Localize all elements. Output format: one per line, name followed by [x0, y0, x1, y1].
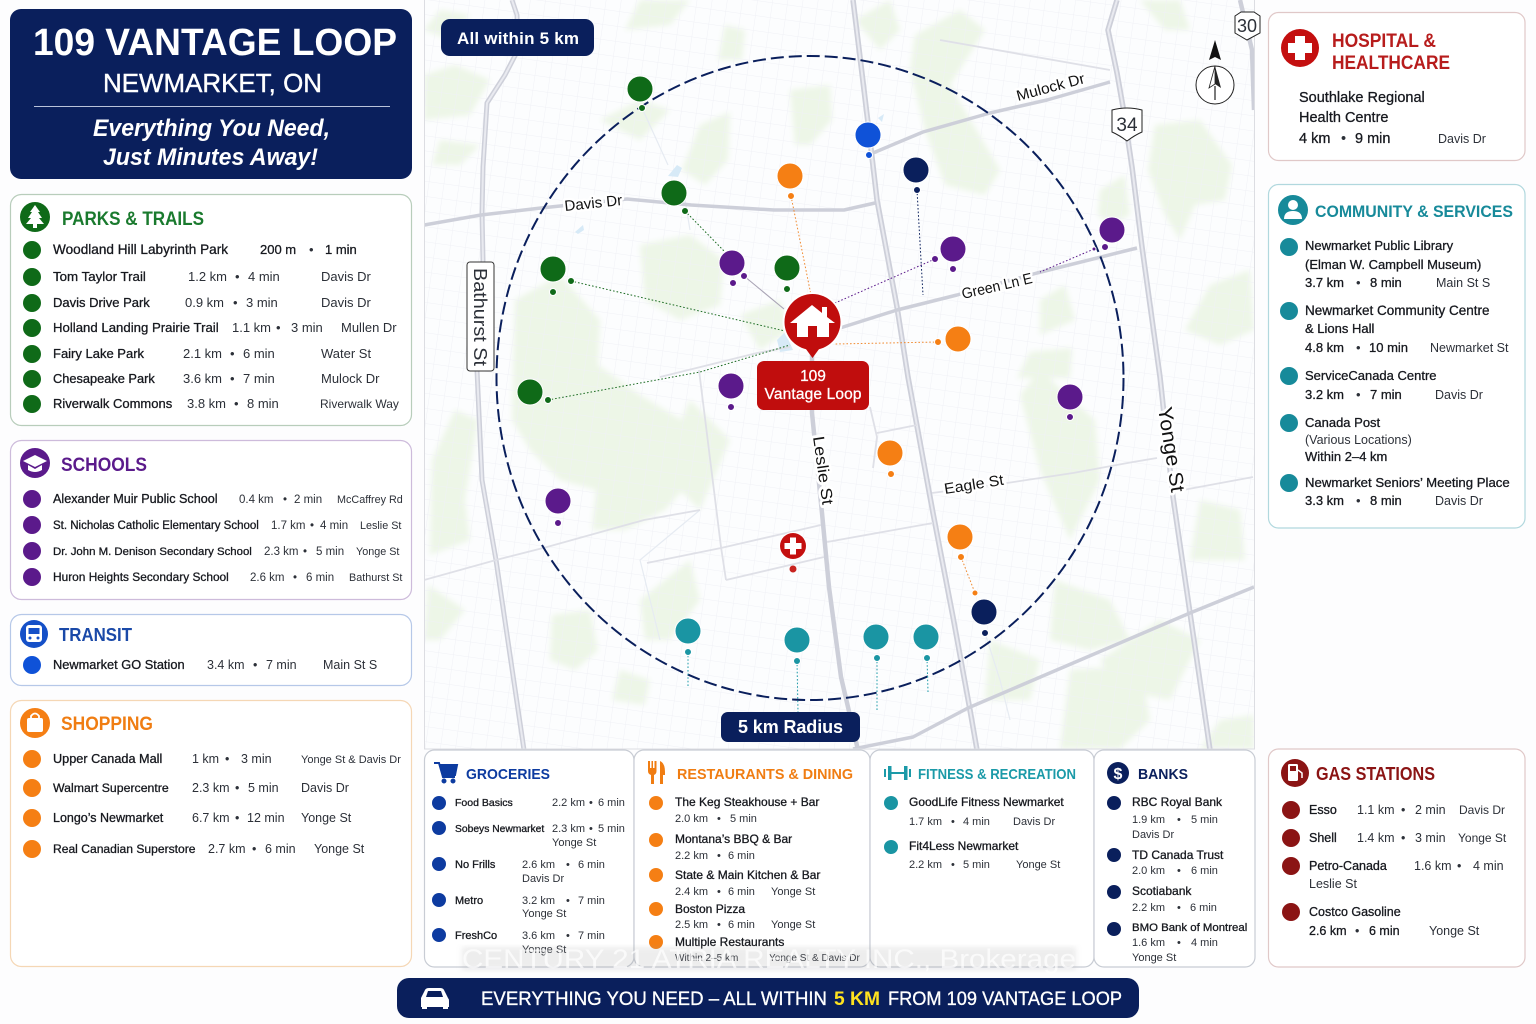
rows: •: [717, 886, 721, 898]
rows: 4 min: [248, 269, 280, 284]
rows: •: [1356, 340, 1361, 355]
banner: [397, 978, 1139, 1018]
rows: 2.6 km: [250, 572, 285, 584]
rows: 3.6 km: [522, 930, 555, 942]
rows: Mullen Dr: [341, 320, 397, 335]
rows: Shell: [1309, 831, 1337, 845]
road label: Leslie St: Leslie St: [809, 435, 836, 506]
icon: tree: [20, 202, 50, 232]
rows: 1.4 km: [1357, 831, 1395, 845]
rows: 6 min: [578, 859, 605, 871]
rows: 2 min: [294, 494, 322, 506]
rows: Sobeys Newmarket: [455, 824, 544, 835]
rows: 2.0 km: [1132, 865, 1165, 877]
rows: 2.6 km: [1309, 924, 1347, 938]
rows: 2.2 km: [675, 850, 708, 862]
heading: SHOPPING: [61, 714, 153, 735]
rows: Davis Dr: [301, 781, 349, 795]
rows: 2.3 km: [264, 546, 299, 558]
rows: 2.2 km: [1132, 902, 1165, 914]
rows: Riverwalk Way: [320, 397, 399, 411]
rows: Fit4Less Newmarket: [909, 839, 1019, 853]
rows: 6 min: [728, 886, 755, 898]
rows: Newmarket St: [1430, 341, 1509, 355]
rows: [1107, 795, 1247, 964]
rows: 6.7 km: [192, 811, 230, 825]
rows: •: [233, 295, 238, 310]
rows: [23, 490, 403, 586]
rows: Montana’s BBQ & Bar: [675, 832, 792, 846]
map markers: banks: [903, 157, 997, 636]
heading: SCHOOLS: [61, 455, 147, 476]
rows: •: [1356, 387, 1361, 402]
rows: Longo’s Newmarket: [53, 811, 164, 825]
rows: 6 min: [306, 572, 334, 584]
rows: Holland Landing Prairie Trail: [53, 320, 219, 335]
rows: Yonge St: [1016, 859, 1060, 871]
rows: 1.7 km: [909, 816, 942, 828]
map: 5 km area map: [424, 0, 1254, 750]
banner text: FROM 109 VANTAGE LOOP: [888, 989, 1122, 1010]
title block: 109 VANTAGE LOOP: [33, 22, 397, 64]
row: 3.4 km: [207, 658, 245, 672]
rows: 5 min: [598, 823, 625, 835]
rows: 2.2 km: [552, 797, 585, 809]
rows: •: [1356, 275, 1361, 290]
rows: 0.9 km: [185, 295, 224, 310]
rows: 1.1 km: [232, 320, 271, 335]
rows: •: [717, 813, 721, 825]
banner text: EVERYTHING YOU NEED – ALL WITHIN: [481, 989, 827, 1010]
rows: 3.2 km: [1305, 387, 1344, 402]
rows: •: [566, 895, 570, 907]
rows: Leslie St: [1309, 877, 1357, 891]
row: Main St S: [323, 658, 377, 672]
rows: (Elman W. Campbell Museum): [1305, 257, 1481, 272]
rows: Multiple Restaurants: [675, 935, 784, 949]
rows: •: [1401, 803, 1405, 817]
map markers: community and fitness: [675, 618, 939, 664]
panel: schools: [10, 440, 412, 600]
watermark: CENTURY 21 ATRIA REALTY INC., Brokerage: [462, 944, 1076, 974]
rows: 3.2 km: [522, 895, 555, 907]
rows: 3.7 km: [1305, 275, 1344, 290]
rows: •: [717, 850, 721, 862]
rows: Metro: [455, 895, 483, 907]
rows: 3.6 km: [183, 371, 222, 386]
rows: 5 min: [1191, 814, 1218, 826]
rows: •: [1356, 493, 1361, 508]
entry: •: [1341, 131, 1346, 147]
rows: [649, 795, 860, 964]
map markers: parks: [517, 76, 800, 405]
rows: St. Nicholas Catholic Elementary School: [53, 520, 259, 532]
rows: 3.8 km: [187, 396, 226, 411]
rows: 6 min: [598, 797, 625, 809]
pill: All within 5 km: All within 5 km: [457, 29, 579, 48]
rows: [1280, 238, 1510, 508]
rows: 2 min: [1415, 803, 1446, 817]
map markers: shopping and dining: [777, 163, 978, 596]
rows: Bathurst St: [349, 572, 402, 584]
rows: 10 min: [1369, 340, 1408, 355]
rows: •: [589, 797, 593, 809]
rows: Leslie St: [360, 520, 401, 532]
rows: 2.6 km: [522, 859, 555, 871]
rows: Davis Dr: [1459, 803, 1505, 817]
road label: Yonge St: Yonge St: [1153, 405, 1188, 494]
rows: •: [234, 396, 239, 411]
road network: [424, 0, 1254, 750]
highway shield 34: [1112, 108, 1142, 141]
rows: 200 m: [260, 242, 296, 257]
entry: [1299, 90, 1486, 147]
rows: •: [717, 919, 721, 931]
map marker: hospital: [779, 532, 807, 572]
rows: Main St S: [1436, 276, 1490, 290]
rows: 6 min: [728, 850, 755, 862]
rows: •: [951, 816, 955, 828]
rows: Boston Pizza: [675, 902, 745, 916]
home pin: 109 Vantage Loop: [757, 292, 869, 410]
rows: 6 min: [1369, 924, 1400, 938]
banner text: [481, 989, 1122, 1010]
heading: [1332, 31, 1450, 74]
highway shield 30: [1235, 12, 1260, 40]
rows: 1 min: [325, 242, 357, 257]
rows: Newmarket Seniors’ Meeting Place: [1305, 475, 1510, 490]
rows: Within 2–5 km: [675, 953, 738, 964]
row: Newmarket GO Station: [53, 657, 185, 672]
panel: community and services: [1268, 184, 1525, 528]
icon: dollar: $: [1114, 766, 1123, 783]
rows: Water St: [321, 346, 371, 361]
rows: 4 min: [1191, 937, 1218, 949]
rows: 5 min: [730, 813, 757, 825]
icon: dumbbell: [884, 766, 911, 780]
icon: fuel pump: [1281, 759, 1309, 787]
rows: Petro-Canada: [1309, 859, 1387, 873]
icon: shopping cart: [434, 763, 457, 782]
rows: 8 min: [1370, 275, 1402, 290]
heading: PARKS & TRAILS: [62, 209, 204, 230]
rows: 4 min: [320, 520, 348, 532]
icon: shopping bag: [20, 708, 50, 738]
heading: HOSPITAL &: [1332, 31, 1436, 52]
rows: 6 min: [265, 842, 296, 856]
rows: 2.7 km: [208, 842, 246, 856]
rows: 7 min: [578, 930, 605, 942]
rows: (Various Locations): [1305, 433, 1412, 447]
highway shield 34: 34: [1116, 115, 1138, 136]
rows: McCaffrey Rd: [337, 494, 403, 506]
pill: 5 km Radius: 5 km Radius: [738, 717, 843, 737]
rows: 2.0 km: [675, 813, 708, 825]
rows: •: [951, 859, 955, 871]
rows: No Frills: [455, 859, 496, 871]
rows: Costco Gasoline: [1309, 905, 1401, 919]
rows: •: [276, 320, 281, 335]
rows: & Lions Hall: [1305, 321, 1374, 336]
rows: Yonge St: [356, 546, 399, 558]
rows: BMO Bank of Montreal: [1132, 922, 1247, 934]
rows: ServiceCanada Centre: [1305, 368, 1437, 383]
rows: 1.6 km: [1132, 937, 1165, 949]
panel: banks: [1094, 750, 1255, 967]
rows: 5 min: [248, 781, 279, 795]
rows: 3.3 km: [1305, 493, 1344, 508]
map markers: schools: [545, 217, 1125, 526]
rows: Yonge St & Davis Dr: [769, 953, 860, 964]
rows: •: [252, 842, 256, 856]
rows: Davis Drive Park: [53, 295, 150, 310]
home pin: 109 Vantage Loop: Vantage Loop: [764, 386, 862, 403]
road label: Green Ln E: Green Ln E: [960, 270, 1034, 303]
panel: transit: [10, 614, 412, 686]
rows: RBC Royal Bank: [1132, 795, 1223, 809]
heading: HEALTHCARE: [1332, 53, 1450, 74]
rows: Davis Dr: [321, 295, 372, 310]
rows: The Keg Steakhouse + Bar: [675, 795, 819, 809]
rows: •: [293, 572, 297, 584]
rows: Yonge St: [1458, 831, 1507, 845]
rows: 4 min: [1473, 859, 1504, 873]
entry: Davis Dr: [1438, 132, 1486, 146]
rows: Real Canadian Superstore: [53, 842, 196, 856]
icon: graduation cap: [20, 448, 50, 478]
rows: Davis Dr: [321, 269, 372, 284]
title block: [10, 9, 412, 179]
rows: Walmart Supercentre: [53, 781, 169, 795]
banner text: 5 KM: [834, 989, 880, 1010]
rows: TD Canada Trust: [1132, 848, 1224, 862]
rows: Upper Canada Mall: [53, 752, 162, 766]
rows: Alexander Muir Public School: [53, 492, 218, 506]
heading: COMMUNITY & SERVICES: [1315, 202, 1513, 221]
rows: Yonge St: [1429, 924, 1480, 938]
pill: 5 km Radius: [721, 712, 860, 742]
panel: gas stations: [1268, 749, 1525, 967]
rows: •: [235, 269, 240, 284]
rows: 1 km: [192, 752, 219, 766]
rows: 4 min: [963, 816, 990, 828]
rows: Yonge St: [771, 919, 815, 931]
rows: •: [230, 371, 235, 386]
entry: 9 min: [1355, 131, 1390, 147]
heading: GAS STATIONS: [1316, 764, 1435, 784]
rows: Tom Taylor Trail: [53, 269, 146, 284]
icon: fork and knife: [648, 761, 665, 784]
rows: 7 min: [578, 895, 605, 907]
rows: Davis Dr: [1132, 829, 1175, 841]
rows: Yonge St: [552, 837, 596, 849]
icon: dollar: [1107, 762, 1129, 784]
panel: hospital and healthcare: [1268, 12, 1525, 160]
home pin: 109 Vantage Loop: 109: [800, 368, 826, 385]
rows: 3 min: [241, 752, 272, 766]
rows: 6 min: [728, 919, 755, 931]
rows: •: [566, 859, 570, 871]
heading: BANKS: [1138, 766, 1188, 783]
road label: Mulock Dr: Mulock Dr: [1015, 70, 1087, 105]
rows: 6 min: [243, 346, 275, 361]
rows: Davis Dr: [1013, 816, 1056, 828]
rows: •: [225, 752, 229, 766]
entry: 4 km: [1299, 131, 1330, 147]
icon: person: [1278, 195, 1308, 225]
rows: 5 min: [316, 546, 344, 558]
rows: Yonge St: [314, 842, 365, 856]
road label: Davis Dr: Davis Dr: [564, 192, 623, 215]
rows: 5 min: [963, 859, 990, 871]
rows: •: [1355, 924, 1359, 938]
rows: Within 2–4 km: [1305, 449, 1387, 464]
rows: 1.7 km: [271, 520, 306, 532]
rows: [884, 795, 1064, 871]
rows: Davis Dr: [1435, 494, 1483, 508]
rows: GoodLife Fitness Newmarket: [909, 795, 1064, 809]
rows: Yonge St & Davis Dr: [301, 754, 401, 766]
heading: GROCERIES: [466, 766, 550, 783]
rows: •: [303, 546, 307, 558]
rows: Mulock Dr: [321, 371, 380, 386]
rows: [432, 796, 625, 956]
panel: groceries: [424, 750, 634, 967]
rows: Newmarket Public Library: [1305, 238, 1454, 253]
rows: [23, 241, 399, 413]
5 km radius circle: [496, 56, 1124, 700]
road label: Bathurst St: Bathurst St: [470, 268, 490, 366]
rows: 0.4 km: [239, 494, 274, 506]
rows: 7 min: [243, 371, 275, 386]
rows: 2.4 km: [675, 886, 708, 898]
rows: Food Basics: [455, 797, 513, 809]
connector lines: [548, 190, 1094, 712]
rows: •: [283, 494, 287, 506]
rows: 2.3 km: [192, 781, 230, 795]
rows: 1.9 km: [1132, 814, 1165, 826]
row: •: [253, 658, 257, 672]
row: [23, 656, 377, 674]
rows: State & Main Kitchen & Bar: [675, 868, 820, 882]
heading: TRANSIT: [59, 625, 132, 645]
rows: •: [566, 930, 570, 942]
rows: 2.3 km: [552, 823, 585, 835]
rows: 2.1 km: [183, 346, 222, 361]
icon: bus: [20, 620, 48, 648]
rows: 1.2 km: [188, 269, 227, 284]
rows: 1.6 km: [1414, 859, 1452, 873]
rows: Yonge St: [771, 886, 815, 898]
rows: •: [235, 811, 239, 825]
rows: 7 min: [1370, 387, 1402, 402]
panel: fitness and recreation: [870, 750, 1094, 967]
panel: restaurants and dining: [634, 750, 870, 967]
rows: Fairy Lake Park: [53, 346, 145, 361]
icon: medical cross: [1281, 29, 1319, 67]
rows: 1.1 km: [1357, 803, 1395, 817]
highway shield 30: 30: [1237, 16, 1257, 36]
row: 7 min: [266, 658, 297, 672]
rows: [1282, 801, 1507, 938]
road label: Bathurst St: [467, 262, 494, 371]
rows: Newmarket Community Centre: [1305, 303, 1490, 318]
rows: Woodland Hill Labyrinth Park: [53, 242, 228, 257]
rows: [23, 750, 401, 858]
entry: Southlake Regional: [1299, 90, 1425, 106]
rows: 3 min: [1415, 831, 1446, 845]
rows: 2.2 km: [909, 859, 942, 871]
icon: north arrow: [1196, 40, 1234, 104]
rows: Huron Heights Secondary School: [53, 570, 229, 584]
rows: 12 min: [247, 811, 285, 825]
rows: Esso: [1309, 803, 1337, 817]
map marker: transit: [855, 122, 881, 158]
entry: Health Centre: [1299, 110, 1388, 126]
rows: •: [1177, 937, 1181, 949]
pill: All within 5 km: [441, 19, 594, 56]
rows: •: [235, 781, 239, 795]
rows: 2.5 km: [675, 919, 708, 931]
rows: Yonge St: [1132, 952, 1176, 964]
rows: 8 min: [1370, 493, 1402, 508]
rows: FreshCo: [455, 930, 497, 942]
rows: •: [310, 520, 314, 532]
icon: car: [421, 988, 449, 1009]
rows: 6 min: [1190, 902, 1217, 914]
rows: Davis Dr: [522, 873, 565, 885]
panel: shopping: [10, 700, 412, 966]
rows: Scotiabank: [1132, 884, 1192, 898]
rows: •: [1401, 831, 1405, 845]
rows: •: [1177, 902, 1181, 914]
rows: •: [1177, 814, 1181, 826]
rows: 3 min: [291, 320, 323, 335]
rows: 6 min: [1191, 865, 1218, 877]
rows: 8 min: [247, 396, 279, 411]
rows: Dr. John M. Denison Secondary School: [53, 546, 252, 558]
rows: 4.8 km: [1305, 340, 1344, 355]
rows: •: [230, 346, 235, 361]
rows: 3 min: [246, 295, 278, 310]
title block: NEWMARKET, ON: [103, 68, 322, 98]
rows: Davis Dr: [1435, 388, 1483, 402]
rows: •: [1457, 859, 1461, 873]
rows: Yonge St: [301, 811, 352, 825]
rows: Riverwalk Commons: [53, 396, 173, 411]
rows: Yonge St: [522, 908, 566, 920]
panel: parks and trails: [10, 194, 412, 426]
rows: Chesapeake Park: [53, 371, 155, 386]
rows: •: [309, 242, 314, 257]
heading: RESTAURANTS & DINING: [677, 766, 853, 783]
title block: Just Minutes Away!: [103, 144, 318, 171]
rows: Yonge St: [522, 944, 566, 956]
rows: •: [1177, 865, 1181, 877]
rows: •: [589, 823, 593, 835]
heading: FITNESS & RECREATION: [918, 766, 1076, 783]
rows: Canada Post: [1305, 415, 1381, 430]
road label: Eagle St: Eagle St: [943, 472, 1006, 498]
title block: Everything You Need,: [93, 115, 330, 142]
